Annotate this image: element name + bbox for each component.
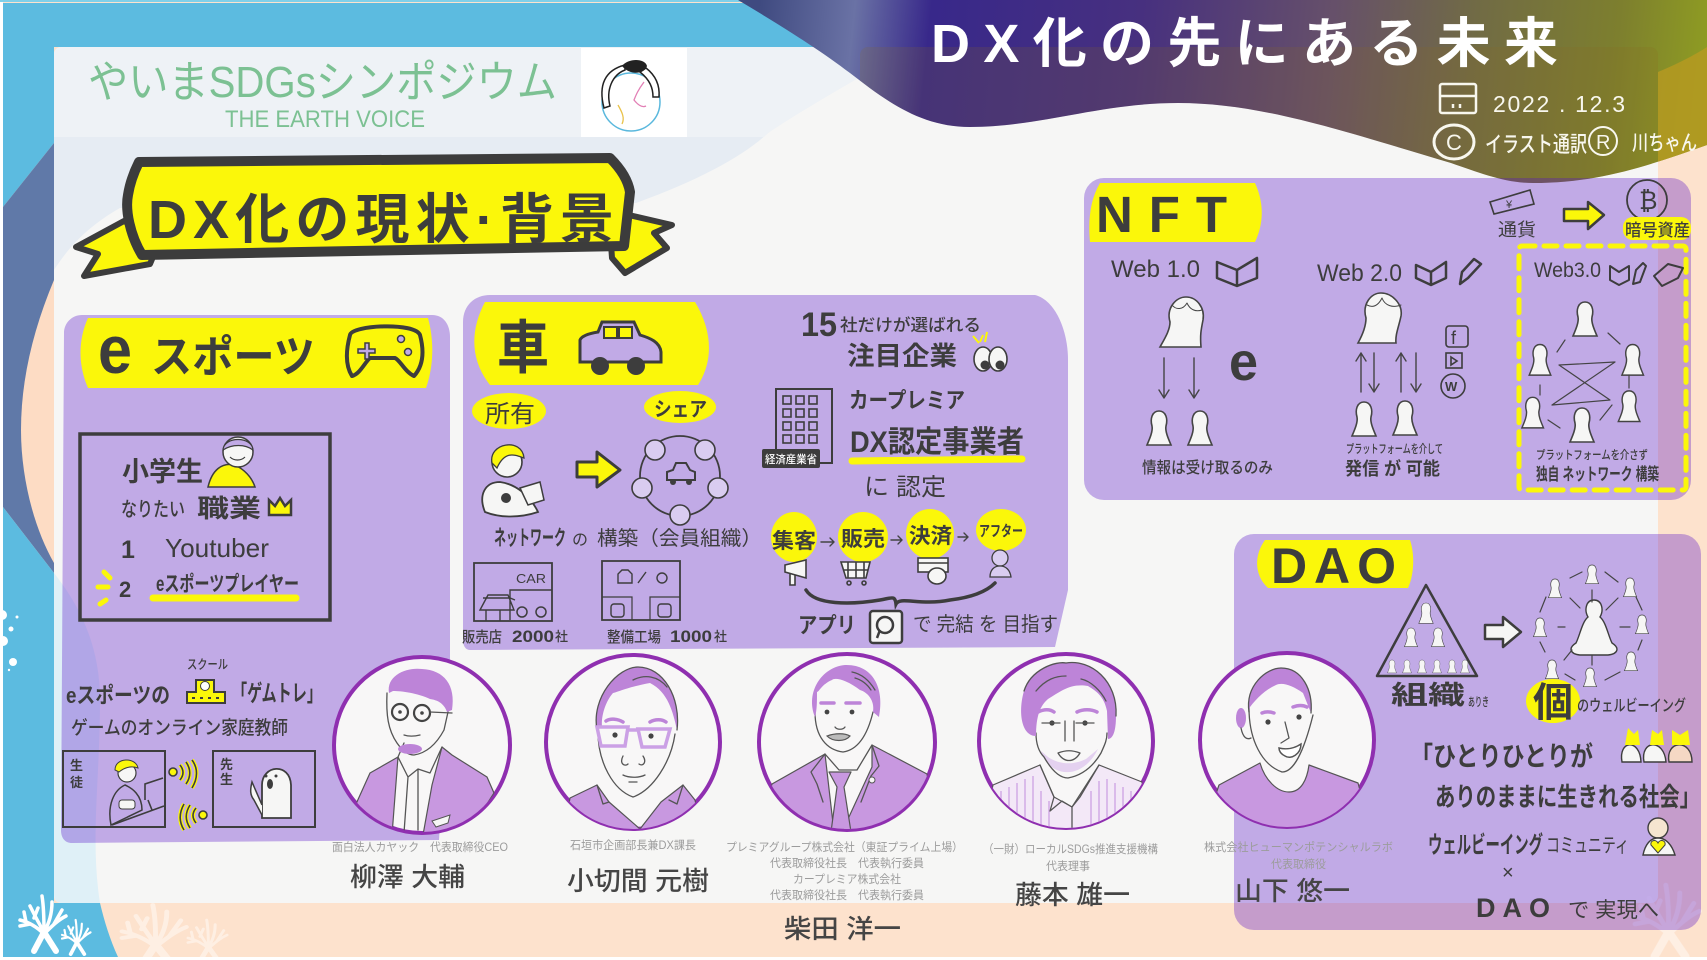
Web 2.0: 発信 が 可能 bbox=[1345, 458, 1440, 479]
community members bbox=[1533, 565, 1649, 687]
section heading: e bbox=[98, 312, 132, 388]
ranking box: 小学生 bbox=[122, 457, 203, 487]
ゲムトレ description: eスポーツの bbox=[66, 683, 170, 708]
video call: student bbox=[63, 751, 165, 827]
DX certification text bbox=[849, 388, 1024, 501]
step: 集客 bbox=[771, 512, 817, 562]
icon: game controller bbox=[347, 326, 422, 376]
notable company note bbox=[801, 306, 1007, 371]
wellbeing community text: × bbox=[1502, 862, 1514, 884]
symposium title: やいまSDGsシンポジウム bbox=[88, 58, 557, 107]
DX certification text: カープレミア bbox=[849, 388, 965, 413]
network text: ネットワーク bbox=[494, 527, 566, 550]
シェア badge bbox=[644, 391, 716, 423]
icons: book and pencil bbox=[1416, 259, 1481, 285]
arrow: hierarchy to wellbeing bbox=[1485, 617, 1521, 647]
icon: registered bbox=[1589, 127, 1617, 155]
section heading: スポーツ bbox=[151, 333, 315, 382]
icon: METI building: 経済産業省 bbox=[765, 452, 817, 466]
currency note: 通貨 bbox=[1498, 220, 1536, 240]
arrows bbox=[1159, 358, 1199, 398]
step: アフター: アフター bbox=[979, 523, 1023, 540]
ranking box: 職業 bbox=[197, 495, 261, 523]
speaker: 小切間 元樹 bbox=[546, 655, 720, 896]
ranking box bbox=[80, 434, 330, 620]
DX certification text: DX認定事業者 bbox=[850, 426, 1024, 459]
icon: megaphone bbox=[785, 560, 806, 585]
icon: copyright bbox=[1434, 125, 1474, 159]
ribbon ends bbox=[76, 221, 160, 276]
step: 決済 bbox=[906, 509, 954, 559]
icon: IE logo: e bbox=[1229, 332, 1258, 392]
個 wellbeing label bbox=[1526, 679, 1686, 725]
ゲムトレ description: ゲームのオンライン家庭教師 bbox=[71, 717, 288, 739]
arrow: currency to crypto bbox=[1564, 202, 1604, 229]
crypto asset: 暗号資産 bbox=[1625, 221, 1690, 240]
icon: child bbox=[208, 437, 255, 487]
wave header background bbox=[738, 0, 1707, 200]
Web 1.0: 情報は受け取るのみ bbox=[1142, 458, 1273, 477]
panel background bbox=[1234, 534, 1701, 930]
speaker: 柴田 洋一 bbox=[726, 654, 963, 944]
icon: sound waves bbox=[169, 760, 207, 830]
dealership: 販売店 bbox=[462, 629, 502, 646]
dealership: CAR bbox=[516, 571, 546, 586]
arrows bbox=[1356, 353, 1421, 392]
ゲムトレ description bbox=[66, 657, 322, 739]
video call: teacher: 先 bbox=[220, 757, 233, 772]
panel background bbox=[61, 315, 450, 843]
icon: car bbox=[580, 322, 661, 375]
audience bbox=[1147, 411, 1212, 445]
affiliation: プレミアグループ株式会社（東証プライム上場） bbox=[726, 840, 963, 854]
speaker: 藤本 雄一 bbox=[979, 654, 1158, 910]
step: 販売 bbox=[838, 512, 888, 562]
icon: car owner bbox=[482, 445, 544, 516]
process flow bbox=[771, 509, 1026, 562]
person bbox=[1358, 293, 1401, 343]
affiliation bbox=[1204, 840, 1393, 871]
name: 小切間 元樹 bbox=[567, 866, 709, 896]
icon: three people bbox=[1622, 728, 1692, 762]
step: 販売: 販売 bbox=[841, 528, 885, 551]
banner: DX化の現状・背景 bbox=[76, 158, 672, 276]
repair shop bbox=[602, 561, 727, 646]
video call: student: 生 bbox=[70, 758, 83, 773]
wellbeing community text: ウェルビーイング bbox=[1428, 831, 1543, 859]
arrow: ownership to sharing bbox=[577, 452, 620, 487]
シェア badge: シェア bbox=[654, 399, 707, 421]
panel: NFT bbox=[1084, 178, 1691, 500]
panel background bbox=[1084, 178, 1691, 500]
app completion text: で 完結 を 目指す bbox=[913, 613, 1058, 636]
affiliation: 代表取締役社長 代表執行委員 bbox=[770, 856, 924, 870]
banner title: DX化の現状·背景 bbox=[148, 190, 614, 250]
所有 badge bbox=[472, 393, 546, 429]
hierarchy pyramid bbox=[1377, 585, 1477, 676]
speaker: 山下 悠一 bbox=[1200, 653, 1393, 906]
affiliation: 代表取締役 bbox=[1271, 857, 1326, 871]
repair shop: 1000 bbox=[670, 627, 712, 646]
icon: book bbox=[1217, 258, 1257, 286]
repair shop: 社 bbox=[714, 629, 727, 644]
icon: support person bbox=[990, 550, 1011, 577]
affiliation: （一財）ローカルSDGs推進支援機構 bbox=[983, 842, 1158, 856]
network text: の bbox=[572, 532, 588, 549]
dealership bbox=[462, 563, 568, 646]
ゲムトレ description: 「ゲムトレ」 bbox=[232, 680, 322, 706]
icons: social media bbox=[1441, 326, 1468, 398]
wellbeing circle bbox=[1533, 565, 1649, 687]
date: 2022 . 12.3 bbox=[1493, 91, 1625, 117]
wellbeing community text: コミュニティ bbox=[1546, 835, 1629, 857]
currency note: ¥ bbox=[1505, 199, 1513, 211]
wellbeing community text: DAO bbox=[1476, 893, 1550, 923]
portrait bbox=[757, 654, 937, 832]
ranking box: なりたい bbox=[121, 499, 185, 521]
currency note bbox=[1490, 190, 1536, 240]
Web 1.0: Web 1.0 bbox=[1111, 256, 1200, 283]
icon: sharing network bbox=[632, 436, 728, 525]
brace bbox=[806, 583, 995, 604]
community links bbox=[1540, 572, 1642, 680]
section heading: DAO bbox=[1271, 538, 1396, 594]
notable company note: 15 bbox=[801, 306, 837, 344]
icon: school bbox=[187, 680, 225, 703]
video call: teacher: 生 bbox=[220, 772, 233, 787]
affiliation: 面白法人カヤック 代表取締役CEO bbox=[332, 840, 508, 854]
main title: DX化の先にある未来 bbox=[931, 14, 1558, 74]
credit: イラスト通訳 bbox=[1485, 132, 1587, 157]
icon: app bbox=[870, 611, 902, 643]
Web 3.0: プラットフォームを介さず bbox=[1536, 448, 1648, 462]
Web 2.0: W bbox=[1445, 379, 1458, 394]
icon: meditating figure bbox=[1571, 600, 1617, 655]
affiliation bbox=[983, 842, 1158, 873]
DX certification text: に 認定 bbox=[864, 474, 946, 501]
section heading: 車 bbox=[497, 316, 549, 381]
network text: 構築（会員組織） bbox=[597, 527, 762, 550]
subtitle: THE EARTH VOICE bbox=[225, 106, 425, 133]
dealership: 社 bbox=[555, 629, 568, 644]
section heading: NFT bbox=[1096, 186, 1227, 243]
ranking box: eスポーツプレイヤー bbox=[156, 573, 299, 596]
icon: copyright: C bbox=[1446, 130, 1462, 155]
icon: calendar bbox=[1440, 84, 1476, 113]
個 wellbeing label: 個 bbox=[1533, 681, 1573, 725]
icon: crown bbox=[269, 498, 291, 515]
affiliation: カープレミア株式会社 bbox=[793, 872, 901, 886]
logo bbox=[581, 48, 687, 137]
hierarchy label: ありき bbox=[1468, 695, 1489, 709]
name: 山下 悠一 bbox=[1235, 876, 1350, 906]
icon: cart bbox=[841, 562, 870, 585]
notable company note: 注目企業 bbox=[847, 341, 957, 371]
name: 柴田 洋一 bbox=[784, 914, 901, 944]
panel: 車 bbox=[462, 295, 1068, 650]
Web 2.0: プラットフォームを介して bbox=[1346, 442, 1443, 456]
affiliation: 石垣市企画部長兼DX課長 bbox=[570, 838, 696, 852]
icon: card and coins bbox=[918, 558, 948, 584]
network links bbox=[1540, 333, 1629, 428]
repair shop: 整備工場 bbox=[607, 629, 661, 646]
step: 決済: 決済 bbox=[909, 525, 952, 548]
person bbox=[1160, 297, 1203, 347]
audience bbox=[1352, 401, 1417, 436]
video call: teacher bbox=[213, 751, 315, 827]
dealership: 2000 bbox=[512, 627, 554, 646]
portrait bbox=[546, 655, 720, 837]
step: 集客: 集客 bbox=[772, 530, 816, 553]
icon: METI building bbox=[762, 389, 832, 468]
icon: eyes bbox=[973, 332, 1007, 371]
portrait bbox=[334, 657, 510, 835]
quote bbox=[1410, 728, 1700, 812]
hierarchy label bbox=[1391, 680, 1489, 710]
hierarchy label: 組織 bbox=[1391, 680, 1465, 710]
section heading bbox=[474, 302, 709, 385]
step: アフター bbox=[976, 509, 1026, 551]
app completion text: アプリ bbox=[798, 613, 856, 638]
wellbeing community text bbox=[1428, 818, 1675, 923]
crypto asset bbox=[1623, 180, 1691, 240]
portrait bbox=[1200, 653, 1374, 835]
panel: DAO bbox=[1234, 534, 1701, 930]
header: symposium name bbox=[88, 58, 557, 133]
ribbon body bbox=[127, 158, 630, 255]
section heading bbox=[80, 312, 432, 388]
portrait bbox=[979, 654, 1153, 836]
network members bbox=[1522, 302, 1644, 442]
flow arrows bbox=[821, 533, 968, 546]
affiliation bbox=[726, 840, 963, 902]
decoration: faint corals bbox=[122, 885, 1699, 960]
panel: eスポーツ bbox=[61, 312, 450, 843]
Web 1.0 bbox=[1111, 256, 1273, 477]
affiliation: 代表理事 bbox=[1046, 860, 1090, 873]
ranking box: Youtuber bbox=[165, 533, 269, 563]
Web 2.0: f bbox=[1451, 328, 1457, 348]
name: 柳澤 大輔 bbox=[350, 862, 465, 892]
speaker: 柳澤 大輔 bbox=[332, 657, 510, 892]
name: 藤本 雄一 bbox=[1015, 880, 1130, 910]
decoration: bubbles and corals bbox=[0, 610, 91, 954]
wellbeing community text: で 実現へ bbox=[1568, 899, 1659, 922]
Web 3.0: Web3.0 bbox=[1534, 259, 1601, 282]
affiliation: 代表取締役社長 代表執行委員 bbox=[770, 888, 924, 902]
ranking box: 1 bbox=[121, 536, 135, 564]
date and credit bbox=[1434, 84, 1697, 159]
notable company note: 社だけが選ばれる bbox=[840, 315, 981, 335]
ranking box: 2 bbox=[119, 577, 131, 602]
app completion text bbox=[798, 611, 1058, 643]
Web 2.0: Web 2.0 bbox=[1317, 260, 1402, 287]
icon: registered: R bbox=[1596, 132, 1610, 154]
video call: student: 徒 bbox=[70, 775, 83, 790]
icons: book, pencil, handshake bbox=[1610, 263, 1683, 286]
Web 2.0 bbox=[1317, 259, 1481, 479]
所有 badge: 所有 bbox=[485, 401, 535, 428]
Web 3.0 bbox=[1519, 246, 1686, 490]
ゲムトレ description: スクール bbox=[187, 657, 228, 672]
panel background bbox=[463, 295, 1068, 650]
affiliation: 株式会社ヒューマンポテンシャルラボ bbox=[1204, 840, 1393, 854]
network text bbox=[494, 527, 762, 550]
crypto asset: ₿ bbox=[1639, 187, 1658, 215]
icon: person with heart bbox=[1643, 818, 1675, 855]
quote: 「ひとりひとりが bbox=[1410, 741, 1593, 772]
